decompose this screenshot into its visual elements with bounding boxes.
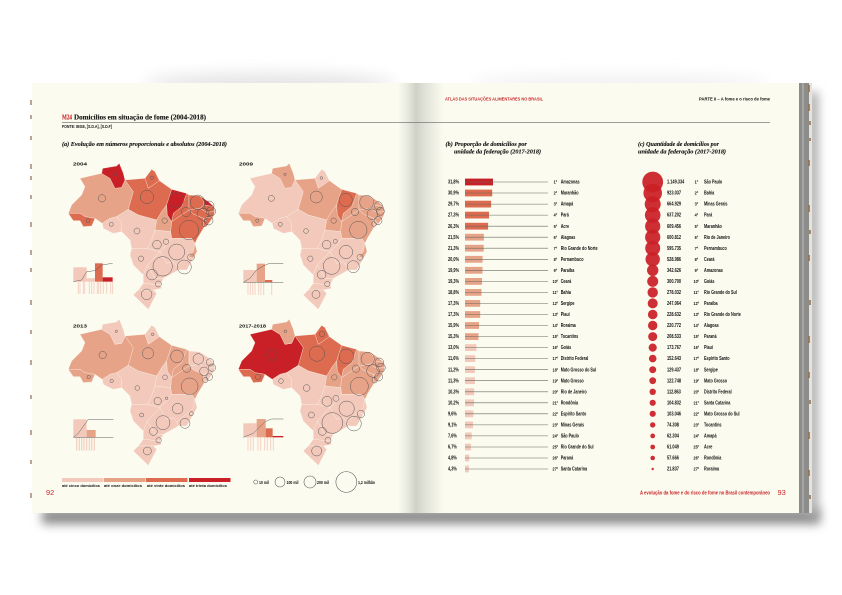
values: household counts: 923.037 <box>667 190 681 196</box>
values: proportion: 4,3% <box>448 466 457 472</box>
values: household counts: 247.064 <box>667 301 681 306</box>
values: household counts: 103.046 <box>667 411 681 417</box>
figure title: Domicílios em situação de fome (2004-2018) <box>74 112 206 121</box>
values: household counts: 208.533 <box>667 334 681 339</box>
values: proportion: 31,8% <box>448 179 459 185</box>
running head: atlas: ATLAS DAS SITUAÇÕES ALIMENTARES NO BRASIL <box>445 97 543 102</box>
ranks: proportion: 14º <box>552 323 558 328</box>
state names: household counts: Rondônia <box>704 455 722 461</box>
ranks: household counts: 11º <box>694 289 699 295</box>
ranks: household counts: 23º <box>694 422 699 428</box>
values: proportion: 21,5% <box>448 234 459 240</box>
ranks: proportion: 13º <box>552 312 558 317</box>
ranks: household counts: 20º <box>694 389 699 395</box>
values: household counts: 57.666 <box>667 455 679 461</box>
ranks: proportion: 3º <box>554 201 557 207</box>
state names: household counts: São Paulo <box>704 179 722 185</box>
ranks: household counts: 9º <box>695 267 698 273</box>
values: proportion: 4,8% <box>448 455 457 461</box>
values: household counts: 152.643 <box>667 356 681 361</box>
ranks: proportion: 2º <box>554 190 557 196</box>
values: household counts: 129.437 <box>667 367 681 372</box>
ranks: household counts: 13º <box>694 312 699 317</box>
state names: proportion: Distrito Federal <box>561 356 588 361</box>
ranks: proportion: 24º <box>552 433 558 439</box>
heading (b) <box>446 141 541 156</box>
state names: proportion: Espírito Santo <box>561 411 586 417</box>
state names: household counts: Goiás <box>704 278 715 284</box>
state names: proportion: Rio Grande do Norte <box>561 245 598 251</box>
legend: colour scale <box>62 478 230 488</box>
state names: household counts: Mato Grosso do Sul <box>704 411 740 417</box>
legend: circle size: 100 mil <box>286 480 298 485</box>
ranks: proportion: 21º <box>552 400 558 406</box>
values: proportion: 15,9% <box>448 323 459 328</box>
inset chart: 2004 <box>73 263 113 294</box>
ranks: household counts: 10º <box>694 278 699 284</box>
ranks: household counts: 12º <box>694 300 699 306</box>
legend: colour scale: até vinte domicílios <box>147 483 186 488</box>
values: household counts: 664.929 <box>667 201 681 207</box>
state names: proportion: Mato Grosso <box>561 378 584 383</box>
state names: household counts: Sergipe <box>704 367 718 372</box>
state names: household counts: Alagoas <box>704 323 719 328</box>
ranks: household counts: 15º <box>694 334 699 339</box>
running head: part: PARTE II – A fome e o risco de fome <box>699 97 771 102</box>
ranks: proportion: 15º <box>552 334 558 339</box>
map: 2009 <box>238 163 385 309</box>
ranks: proportion: 27º <box>552 466 558 472</box>
values: proportion: 7,6% <box>448 433 457 439</box>
state names: proportion: Mato Grosso do Sul <box>561 367 596 372</box>
state names: proportion: Tocantins <box>561 334 579 339</box>
ranks: household counts: 27º <box>694 466 699 472</box>
values: household counts: 600.812 <box>667 234 681 240</box>
ranks: household counts: 24º <box>694 433 699 439</box>
legend: circle size <box>254 472 375 492</box>
legend: circle size: 10 mil <box>259 480 269 485</box>
state names: household counts: Rio de Janeiro <box>704 234 730 240</box>
state names: proportion: Rio Grande do Sul <box>561 444 594 450</box>
ranks: proportion: 9º <box>554 267 557 273</box>
values: household counts: 104.832 <box>667 400 681 406</box>
ranks: household counts: 17º <box>694 356 699 361</box>
ranks: household counts: 4º <box>695 212 698 218</box>
heading (c): (c) Quantidade de domicílios por <box>638 141 719 148</box>
ranks: household counts: 22º <box>694 411 699 417</box>
ranks: proportion: 20º <box>552 389 558 395</box>
state names: proportion: Rio de Janeiro <box>561 389 587 395</box>
values: proportion: 18,8% <box>448 290 459 295</box>
heading (a): (a) Evolução em números proporcionais e absolutos (2004-2018) <box>62 141 227 148</box>
ranks: household counts: 19º <box>694 378 699 383</box>
state names: proportion: Roraima <box>561 323 576 328</box>
heading (c) <box>638 141 726 156</box>
state names: proportion: Alagoas <box>561 234 576 240</box>
ranks: proportion: 1º <box>554 179 557 185</box>
state names: household counts: Santa Catarina <box>704 400 731 406</box>
values: proportion: 26,3% <box>448 223 459 229</box>
values: household counts: 342.626 <box>667 267 681 273</box>
header rule <box>62 121 770 123</box>
values: proportion: 11,2% <box>448 367 459 372</box>
label: year 2009: 2009 <box>239 162 254 167</box>
ranks: proportion: 8º <box>554 256 557 262</box>
state names: household counts: Amazonas <box>704 267 723 273</box>
panel: left page <box>32 83 416 513</box>
ranks: proportion: 26º <box>552 455 558 461</box>
bubble chart: households by state <box>642 172 663 470</box>
state names: household counts: Rio Grande do Sul <box>704 289 737 295</box>
values: proportion: 19,9% <box>448 267 459 273</box>
ranks: household counts: 18º <box>694 367 699 372</box>
page number 92: 92 <box>46 488 54 497</box>
values: household counts: 61.049 <box>667 444 679 450</box>
state names: household counts: Distrito Federal <box>704 389 732 395</box>
state names: proportion: Acre <box>561 223 570 229</box>
state names: household counts: Maranhão <box>704 223 722 229</box>
state names: proportion: Paraíba <box>561 267 575 273</box>
values: household counts: 21.837 <box>667 466 679 472</box>
state names: proportion: Minas Gerais <box>561 422 585 428</box>
state names: household counts: Mato Grosso <box>704 378 727 383</box>
state names: proportion: Pernambuco <box>561 256 584 262</box>
ranks: proportion: 17º <box>552 356 558 361</box>
heading (b): (b) Proporção de domicílios por <box>446 141 527 148</box>
values: household counts: 609.456 <box>667 223 681 229</box>
figure title: M24 <box>62 112 72 121</box>
label: year 2017-2018: 2017-2018 <box>239 324 267 329</box>
map: 2017-2018 <box>238 319 385 465</box>
ranks: proportion: 5º <box>554 223 557 229</box>
legend: colour scale: até cinco domicílios <box>62 483 101 488</box>
values: household counts: 122.748 <box>667 378 681 383</box>
state names: proportion: Amazonas <box>561 179 580 185</box>
ranks: proportion: 19º <box>552 378 558 383</box>
map: 2013 <box>68 319 216 465</box>
book shadow <box>42 74 820 524</box>
ranks: proportion: 25º <box>552 444 558 450</box>
state names: proportion: Paraná <box>561 455 574 461</box>
state names: household counts: Acre <box>704 444 713 450</box>
state names: proportion: Pará <box>561 212 569 218</box>
ranks: household counts: 8º <box>695 256 698 262</box>
values: proportion: 29,7% <box>448 201 459 207</box>
label: year 2013: 2013 <box>73 324 88 329</box>
state names: proportion: Piauí <box>561 312 570 317</box>
values: proportion: 11,6% <box>448 356 459 361</box>
state names: proportion: Ceará <box>561 278 572 284</box>
ranks: proportion: 18º <box>552 367 558 372</box>
legend: colour scale: até trinta domicílios <box>189 483 228 488</box>
legend: circle size: 200 mil <box>317 480 329 485</box>
heading (b): unidade da federação (2017-2018) <box>454 148 541 156</box>
values: proportion: 27,3% <box>448 212 459 218</box>
values: household counts: 74.308 <box>667 422 679 428</box>
state names: household counts: Rio Grande do Norte <box>704 312 741 317</box>
values: household counts: 1.149.334 <box>667 179 685 185</box>
ranks: household counts: 1º <box>695 179 698 185</box>
ranks: household counts: 7º <box>695 245 698 251</box>
state names: household counts: Espírito Santo <box>704 356 730 361</box>
inset chart: 2013 <box>73 419 113 451</box>
state names: household counts: Pernambuco <box>704 245 727 251</box>
page edge: left marks <box>30 100 32 498</box>
state names: household counts: Bahia <box>704 190 715 196</box>
state names: household counts: Paraíba <box>704 300 718 306</box>
page number 93: 93 <box>778 488 786 497</box>
ranks: proportion: 16º <box>552 345 558 350</box>
ranks: household counts: 3º <box>695 201 698 207</box>
ranks: household counts: 21º <box>694 400 699 406</box>
values: household counts: 278.032 <box>667 290 681 295</box>
state names: household counts: Roraima <box>704 466 720 472</box>
values: proportion: 19,3% <box>448 279 459 284</box>
ranks: household counts: 14º <box>694 323 699 328</box>
state names: household counts: Paraná <box>704 334 717 339</box>
values: proportion: 17,3% <box>448 312 459 317</box>
values: household counts: 228.632 <box>667 312 681 317</box>
ranks: proportion: 12º <box>552 300 558 306</box>
values: household counts: 300.700 <box>667 279 681 284</box>
legend: colour scale: até onze domicílios <box>104 483 143 488</box>
values: household counts: 637.202 <box>667 212 681 218</box>
state names: proportion: Bahia <box>561 289 571 295</box>
values: household counts: 220.772 <box>667 323 681 328</box>
state names: household counts: Minas Gerais <box>704 201 728 207</box>
values: proportion: 11,3% <box>448 378 459 383</box>
values: proportion: 15,3% <box>448 334 459 339</box>
values: household counts: 173.767 <box>667 345 681 350</box>
state names: proportion: Maranhão <box>561 190 579 196</box>
state names: household counts: Ceará <box>704 256 715 262</box>
label: year 2004: 2004 <box>73 162 88 167</box>
values: proportion: 17,3% <box>448 301 459 306</box>
ranks: proportion: 23º <box>552 422 558 428</box>
ranks: household counts: 2º <box>695 190 698 196</box>
values: proportion: 6,7% <box>448 444 457 450</box>
state names: proportion: Sergipe <box>561 300 575 306</box>
ranks: household counts: 25º <box>694 444 699 450</box>
ranks: household counts: 5º <box>695 223 698 229</box>
inset chart: 2017-2018 <box>243 419 283 451</box>
page edge: right block <box>799 83 812 513</box>
ranks: proportion: 11º <box>552 289 558 295</box>
state names: household counts: Pará <box>704 212 713 218</box>
values: proportion: 9,1% <box>448 422 457 428</box>
ranks: household counts: 16º <box>694 345 699 350</box>
ranks: proportion: 7º <box>554 245 557 251</box>
state names: household counts: Piauí <box>704 345 714 350</box>
values: proportion: 9,6% <box>448 411 457 417</box>
heading (c): unidade da federação (2017-2018) <box>638 148 726 156</box>
state names: proportion: São Paulo <box>561 433 579 439</box>
panel: right page <box>416 83 799 513</box>
state names: proportion: Goiás <box>561 345 572 350</box>
bar chart: proportion by state <box>465 179 548 472</box>
values: household counts: 528.986 <box>667 256 681 262</box>
values: proportion: 13,0% <box>448 345 459 350</box>
state names: proportion: Santa Catarina <box>561 466 588 472</box>
footer: running title: A evolução da fome e do risco de fome no Brasil contemporâneo <box>640 490 770 496</box>
state names: household counts: Amapá <box>704 433 717 439</box>
values: proportion: 10,3% <box>448 389 459 395</box>
values: household counts: 62.304 <box>667 433 679 439</box>
gutter shading <box>398 83 444 513</box>
ranks: household counts: 6º <box>695 234 698 240</box>
state names: proportion: Amapá <box>561 201 574 207</box>
state names: proportion: Rondônia <box>561 400 579 406</box>
state names: household counts: Tocantins <box>704 422 722 428</box>
values: proportion: 20,0% <box>448 256 459 262</box>
ranks: proportion: 22º <box>552 411 558 417</box>
values: household counts: 595.735 <box>667 245 681 251</box>
values: proportion: 10,2% <box>448 400 459 406</box>
ranks: proportion: 10º <box>552 278 558 284</box>
values: proportion: 30,9% <box>448 190 459 196</box>
ranks: proportion: 6º <box>554 234 557 240</box>
legend: circle size: 1,2 milhão <box>358 480 375 485</box>
inset chart: 2009 <box>243 263 283 295</box>
values: proportion: 21,3% <box>448 245 459 251</box>
values: household counts: 112.863 <box>667 389 681 395</box>
ranks: household counts: 26º <box>694 455 699 461</box>
source: FONTE: IBGE, [S.D.A], [S.D.F] <box>62 124 112 129</box>
map: 2004 <box>68 163 216 309</box>
ranks: proportion: 4º <box>554 212 557 218</box>
